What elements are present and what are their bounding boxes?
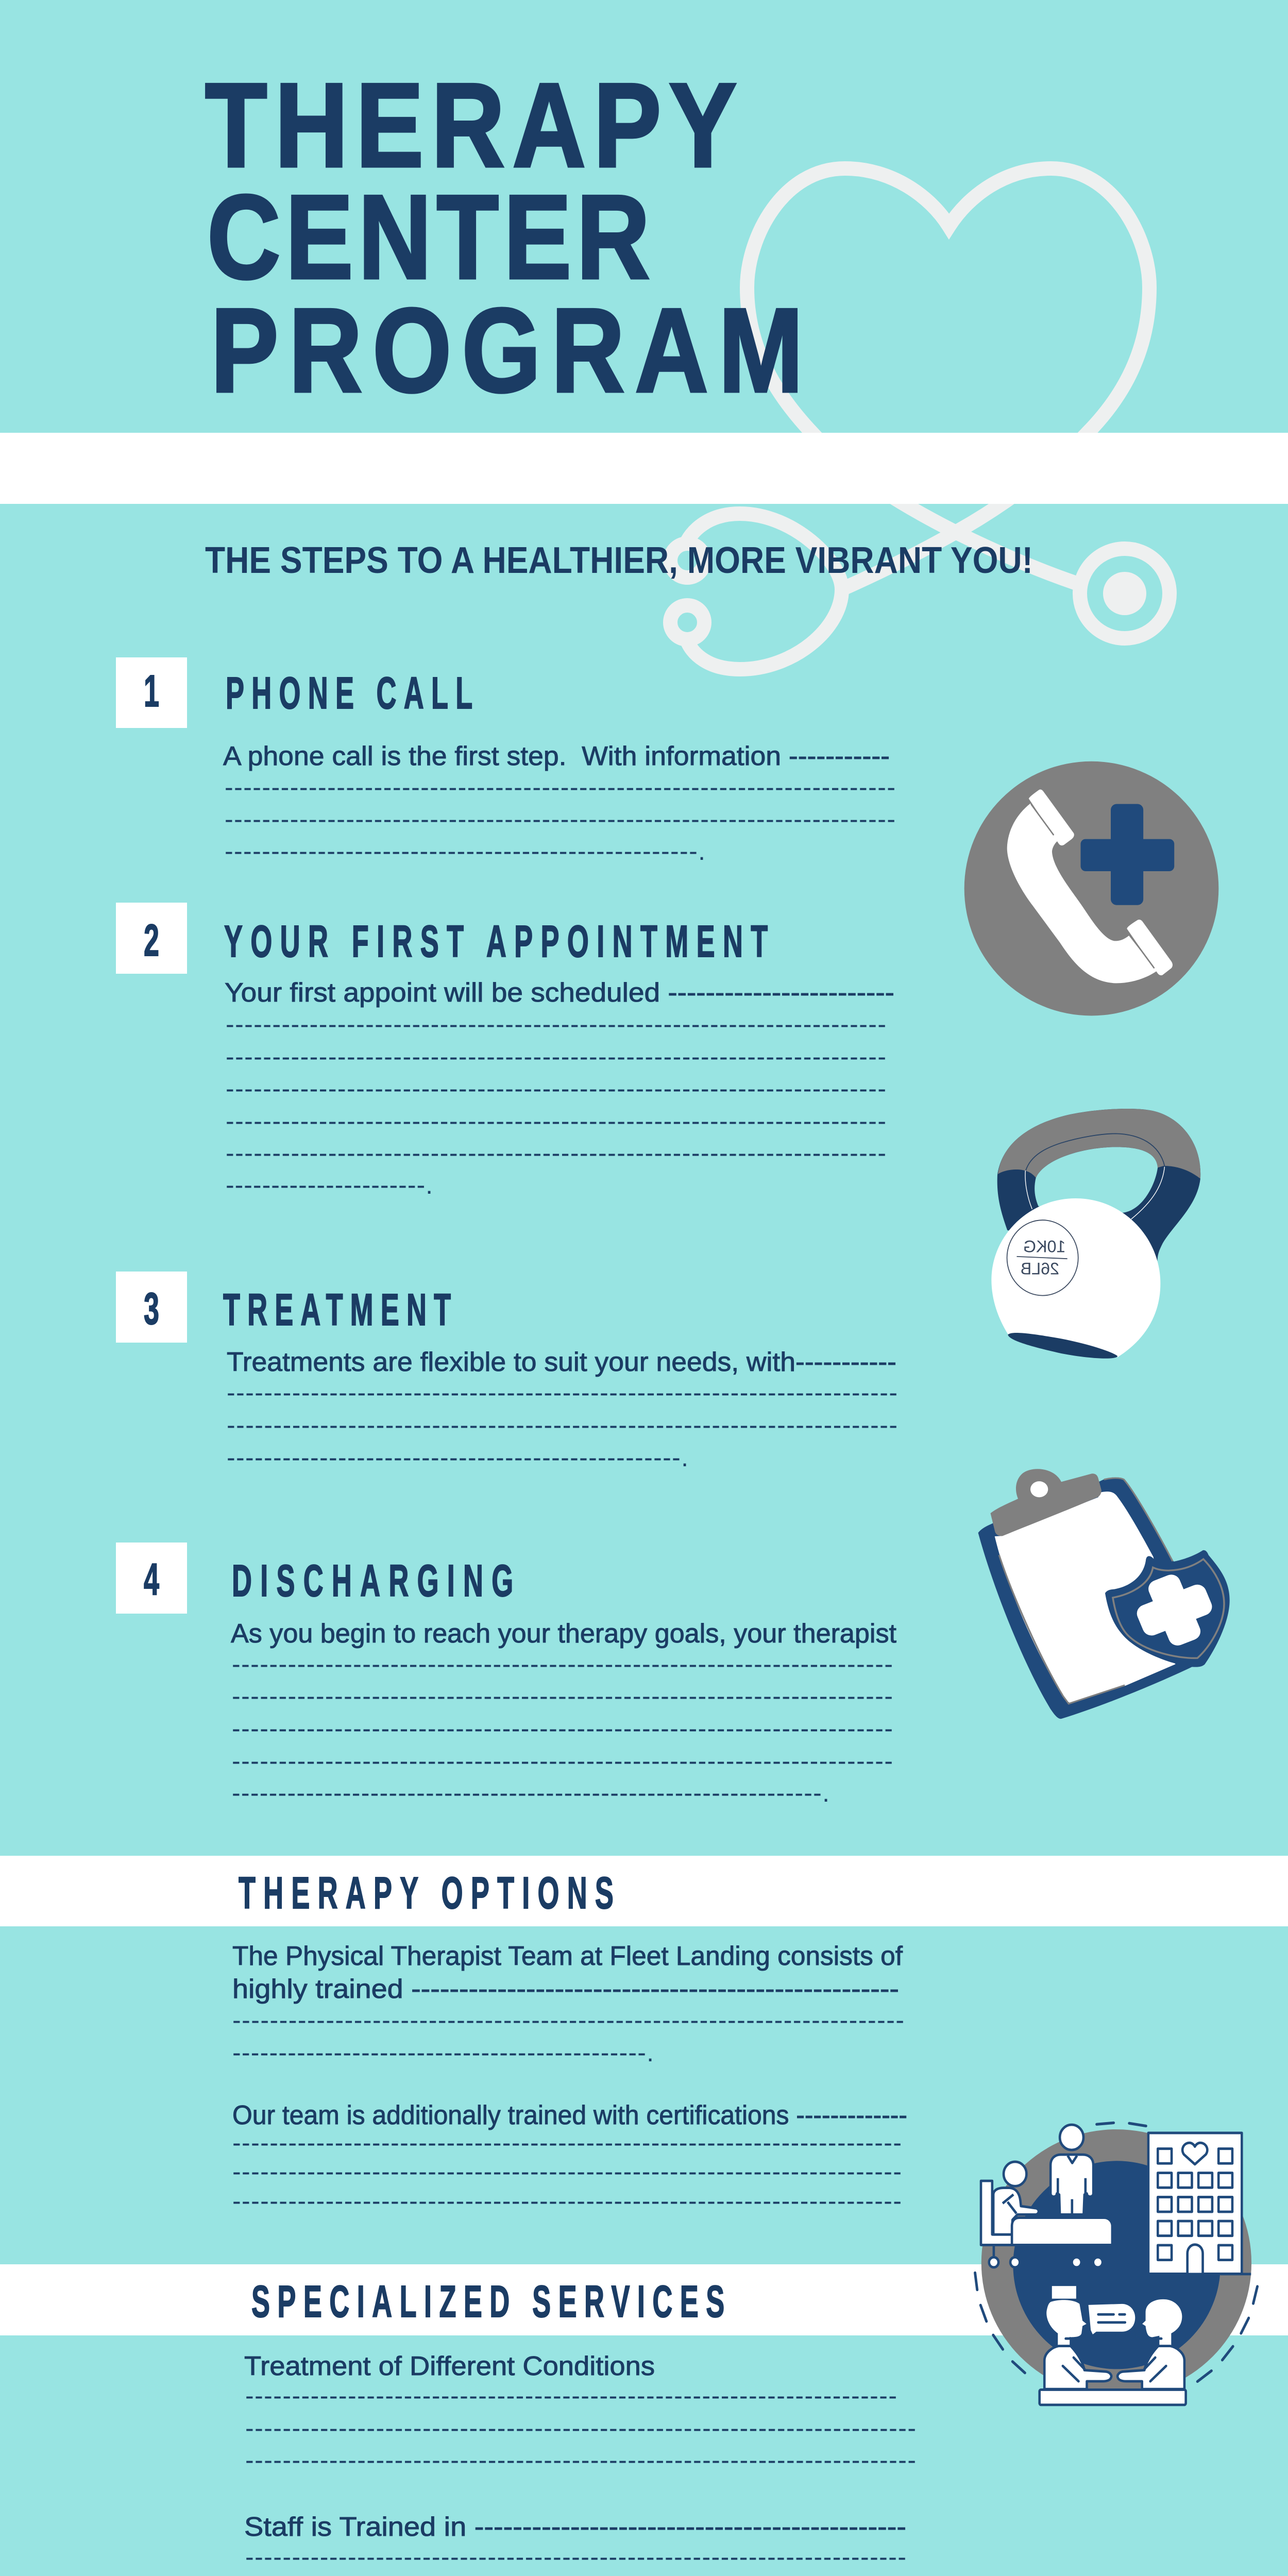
therapy options text: highly trained --------------------------------------------------- [232,1974,899,2004]
step number 3 [116,1272,187,1343]
panel: step 1 phone call [116,657,895,866]
white band: therapy options [0,1856,1288,1926]
step 4 body text: ----------------------------------------------------------------------- [232,1714,893,1743]
therapy options text: The Physical Therapist Team at Fleet Landing consists of [232,1941,903,1971]
icon: phone with medical cross [964,761,1218,1015]
specialized services text: Treatment of Different Conditions [244,2351,655,2381]
specialized services text [244,2351,916,2576]
hospital building [1148,2133,1251,2274]
step 4 body text: ----------------------------------------------------------------------- [232,1650,893,1679]
therapy options text: ------------------------------------------------------------------------ [232,2157,902,2186]
step 4 body text: ----------------------------------------------------------------. [232,1778,829,1807]
step 4 heading: DISCHARGING [232,1556,513,1606]
step 2 body text: ----------------------------------------------------------------------- [226,1010,886,1039]
title [205,58,803,417]
icon: kettlebell: 10KG [1023,1237,1065,1256]
step 1 body text: ------------------------------------------------------------------------ [225,805,895,834]
therapy options text: Our team is additionally trained with certifications ------------- [232,2100,907,2130]
step 2 body text: ----------------------------------------------------------------------- [226,1139,886,1167]
patient and doctor [981,2125,1112,2267]
specialized services text: ------------------------------------------------------------------------ [245,2414,916,2443]
specialized services text: ---------------------------------------------------------------------- [245,2381,897,2410]
step 2 heading: YOUR FIRST APPOINTMENT [224,917,768,967]
specialized services text: Staff is Trained in --------------------------------------------- [244,2512,906,2542]
therapy options text: ---------------------------------------------. [232,2038,654,2067]
icon: kettlebell: 26LB [1021,1259,1059,1278]
step 3 heading: TREATMENT [223,1285,451,1335]
icon: kettlebell [991,1109,1200,1359]
step 3 body text: Treatments are flexible to suit your needs, with----------- [227,1347,896,1377]
title: THERAPY [205,58,737,192]
subtitle: THE STEPS TO A HEALTHIER, MORE VIBRANT YOU! [205,540,1033,581]
title: PROGRAM [211,283,803,417]
step 2 body text: ----------------------------------------------------------------------- [226,1042,886,1071]
step 2 body text [225,978,894,1199]
step number 4: 4 [144,1554,159,1604]
step number 1 [116,657,187,728]
step 4 body text: ----------------------------------------------------------------------- [232,1747,893,1775]
specialized services text: ------------------------------------------------------------------------ [245,2446,916,2475]
step 4 body text: As you begin to reach your therapy goals, your therapist [231,1619,897,1649]
step 1 body text: ---------------------------------------------------. [225,837,705,866]
step 3 body text: ------------------------------------------------------------------------ [227,1411,897,1439]
white band: specialized services [0,2264,1288,2335]
icon: clipboard with shield [978,1469,1230,1719]
step 2 body text: ----------------------------------------------------------------------- [226,1107,886,1136]
step 1 body text [223,741,895,866]
therapy options text: ------------------------------------------------------------------------ [232,2006,904,2035]
two people talking [1040,2286,1186,2405]
panel: specialized services [244,2277,916,2576]
step 2 body text: ----------------------. [226,1171,433,1199]
panel: therapy options [232,1868,907,2215]
specialized services text: ----------------------------------------------------------------------- [245,2543,906,2571]
step 3 body text: ------------------------------------------------------------------------ [227,1378,897,1407]
therapy options text [232,1941,907,2215]
panel: step 2 first appointment [116,903,894,1199]
title: CENTER [207,170,650,304]
step number 2 [116,903,187,974]
therapy options heading: THERAPY OPTIONS [239,1868,614,1918]
step 2 body text: ----------------------------------------------------------------------- [226,1074,886,1103]
icon: hospital team [975,2123,1258,2405]
step 3 body text: -------------------------------------------------. [227,1443,688,1472]
therapy options text: ------------------------------------------------------------------------ [232,2128,902,2157]
panel: step 4 discharging [116,1543,897,1807]
step 3 body text [227,1347,897,1472]
panel: step 3 treatment [116,1272,897,1472]
step number 2: 2 [144,916,159,965]
step 4 body text: ----------------------------------------------------------------------- [232,1682,893,1710]
specialized services heading: SPECIALIZED SERVICES [251,2277,724,2327]
step 1 body text: ------------------------------------------------------------------------ [225,773,895,802]
step number 4 [116,1543,187,1614]
icon: heart stethoscope [670,168,1170,669]
step 1 heading: PHONE CALL [226,668,472,718]
step 1 body text: A phone call is the first step. With information ----------- [223,741,890,771]
step 2 body text: Your first appoint will be scheduled ------------------------ [225,978,894,1008]
step number 3: 3 [144,1284,159,1334]
step 4 body text [231,1619,897,1807]
step number 1: 1 [144,666,159,716]
therapy options text: ------------------------------------------------------------------------ [232,2187,902,2215]
white band: header [0,433,1288,504]
